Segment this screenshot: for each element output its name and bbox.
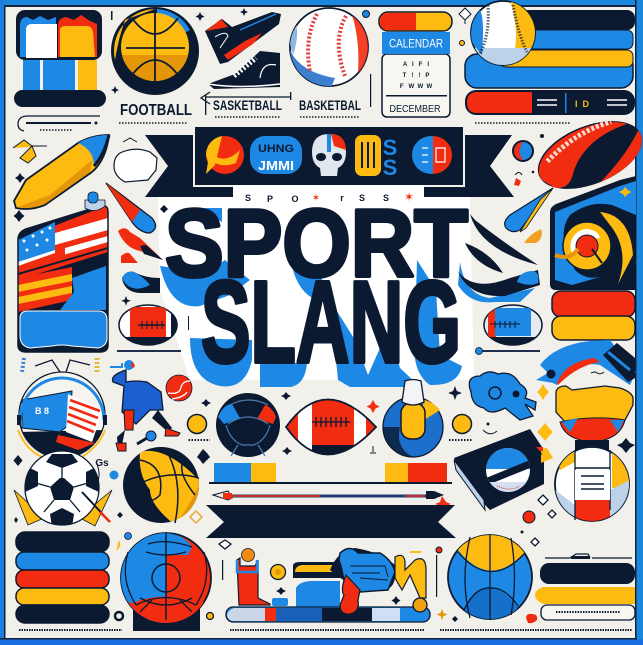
icon: target ball xyxy=(118,530,215,631)
banner icon: blue red disc xyxy=(412,136,452,174)
title: SPORT: SPORT xyxy=(165,190,468,297)
icon: bottom machine scene xyxy=(226,547,458,622)
icon: left small football xyxy=(119,305,179,347)
calendar heading: CALENDAR xyxy=(389,38,443,50)
icon: side marks soccer: Gs xyxy=(95,458,109,469)
icon: baseball top xyxy=(289,7,369,87)
icon: yellow dot right xyxy=(449,414,497,440)
icon: calendar xyxy=(379,12,452,117)
icon: dart right xyxy=(505,188,553,243)
icon: blue yellow ball xyxy=(448,530,532,625)
icon: right small football xyxy=(484,305,545,347)
icon: small ball xyxy=(513,134,544,186)
small marks right xyxy=(366,384,635,546)
sub heading: ✶ xyxy=(404,190,414,204)
antenna xyxy=(22,358,97,372)
sub heading: O xyxy=(291,194,299,204)
icon: soccer ball xyxy=(14,451,112,527)
icon: flag panel xyxy=(15,200,111,355)
small decorative icons top xyxy=(111,8,471,107)
swatch bar left xyxy=(214,463,276,482)
icon: pencil rocket xyxy=(14,135,109,209)
label: football: FOOTBALL xyxy=(120,102,192,119)
icon: blue cloud xyxy=(469,372,536,420)
sub heading xyxy=(245,190,414,204)
ribbon: left tail xyxy=(145,135,233,197)
label: sasketball: SASKETBALL xyxy=(213,98,282,113)
icon: white yellow ball xyxy=(554,448,630,522)
title swooshes xyxy=(458,214,540,296)
icon: whistle panel xyxy=(550,176,636,290)
icon: red tennis ball xyxy=(166,375,192,401)
banner icon: blue blob: UHNG xyxy=(258,143,294,155)
arrow: long spear xyxy=(213,491,444,500)
banner panel xyxy=(195,127,463,185)
icon: red football top right xyxy=(528,108,643,202)
icon: player figure xyxy=(110,360,180,451)
icon: calendar: F W W W xyxy=(400,84,432,90)
bar stack bottom left xyxy=(16,532,109,623)
icon: yellow dot xyxy=(188,414,210,440)
badge letters: B 8 xyxy=(35,406,49,416)
icon: blue wing xyxy=(536,340,636,385)
slider rule right xyxy=(476,348,540,354)
yellow pill xyxy=(552,316,635,340)
banner icon: skull helmet xyxy=(312,134,346,176)
rule left xyxy=(117,350,181,352)
icon: headphone flag badge xyxy=(18,372,105,460)
banner icon: OS letters xyxy=(355,135,397,180)
icon: calendar: T ! ! P xyxy=(403,73,429,79)
dotted rules under labels xyxy=(40,117,571,130)
icon: jersey block xyxy=(14,10,106,107)
icon: navy ball xyxy=(216,393,280,457)
sub heading: r xyxy=(340,193,344,203)
title white backing xyxy=(158,185,474,380)
rule under swatches xyxy=(209,482,452,484)
banner icon: speech bubble xyxy=(206,136,244,174)
ribbon: right tail xyxy=(424,135,514,197)
icon: sneakers xyxy=(205,12,281,89)
red pill xyxy=(552,291,635,317)
icon: bottle cap xyxy=(85,192,105,211)
icon: white bubble xyxy=(114,138,157,182)
icon: capsule disc xyxy=(383,380,443,457)
icon: basketball top xyxy=(111,7,199,95)
swatch bar right xyxy=(385,463,447,482)
sub heading: P xyxy=(267,194,273,204)
banner icon: OS letters: S xyxy=(383,155,397,180)
banner icon: blue blob xyxy=(250,136,302,174)
sub heading: S xyxy=(383,193,389,203)
icon: red blue dart xyxy=(106,183,156,233)
banner icon: OS letters: S xyxy=(383,135,397,160)
calendar day marks: A I F I xyxy=(403,62,429,68)
bar label: I D xyxy=(575,99,589,109)
icon: basketball bottom xyxy=(123,447,199,525)
small dots near target xyxy=(115,540,231,620)
swoosh line left xyxy=(18,116,100,131)
icon: baseball top right xyxy=(470,0,536,66)
small marks mid left xyxy=(14,205,189,330)
bottom right bars xyxy=(526,554,635,623)
sub heading: S xyxy=(245,193,251,203)
icon: side marks soccer xyxy=(14,392,292,550)
arrow: between labels xyxy=(201,92,291,115)
banner icon: blue blob: JMMI xyxy=(258,158,294,173)
label: basketbal: BASKETBAL xyxy=(299,98,361,113)
icon: face helmet yellow xyxy=(556,386,633,452)
bar stack top right xyxy=(465,10,635,115)
title blue shadow xyxy=(160,208,535,387)
calendar month: DECEMBER xyxy=(390,103,441,115)
sub heading: ✶ xyxy=(312,193,320,204)
sub heading: S xyxy=(359,193,365,203)
title: SLANG: SLANG xyxy=(201,257,461,387)
icon: book with baseball xyxy=(454,429,553,510)
icon: small pennant xyxy=(13,140,47,183)
bottom dotted rules xyxy=(19,629,632,631)
ribbon: bottom banner xyxy=(206,505,456,538)
icon: large football xyxy=(285,398,378,456)
